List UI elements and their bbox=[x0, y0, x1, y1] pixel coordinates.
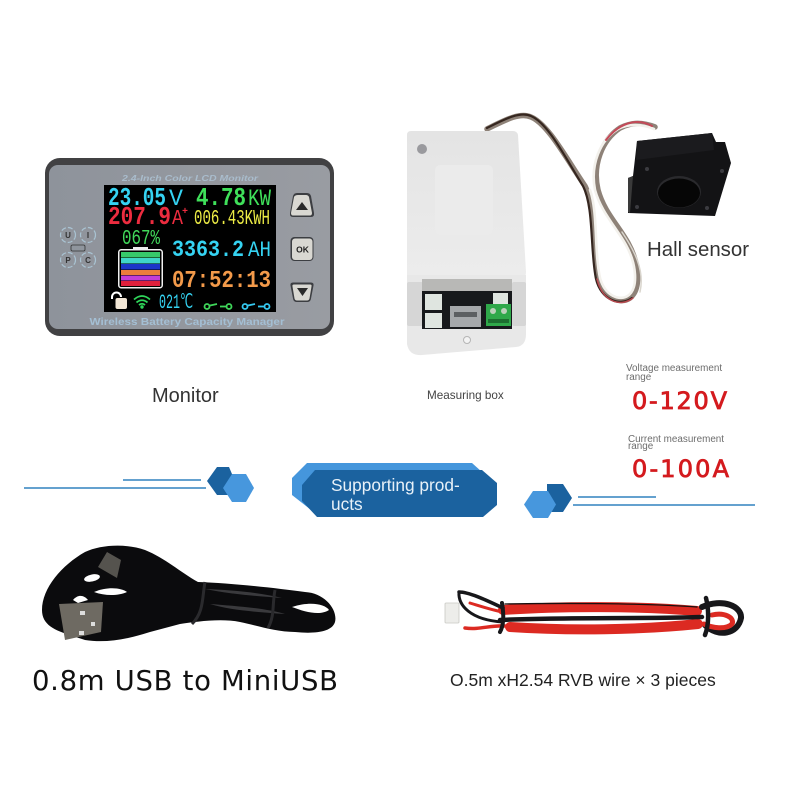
current value: 0-100A bbox=[632, 455, 730, 483]
cable mass bbox=[42, 546, 335, 641]
reading: amp hours: 3363.2 bbox=[172, 237, 244, 263]
box upper shell bbox=[407, 131, 526, 276]
product: USB cable bbox=[42, 546, 335, 641]
button: up bbox=[290, 193, 314, 217]
sensor aperture bbox=[657, 176, 701, 208]
current caption: Current measurement bbox=[628, 434, 724, 445]
current caption: range bbox=[628, 441, 654, 452]
mini USB plug bbox=[98, 552, 121, 578]
monitor bottom caption: Wireless Battery Capacity Manager bbox=[90, 316, 284, 328]
label: Monitor: Monitor bbox=[152, 385, 219, 407]
USB-A plug bbox=[59, 602, 103, 640]
reading: energy: 006.43KWH bbox=[194, 208, 270, 231]
icon: battery level bbox=[119, 247, 162, 288]
label: Hall sensor: Hall sensor bbox=[647, 239, 749, 261]
cable loop gaps bbox=[73, 573, 329, 614]
UIPC indicator cluster bbox=[60, 228, 96, 268]
panel: measuring box bbox=[407, 131, 526, 355]
voltage value: 0-120V bbox=[632, 387, 728, 415]
voltage caption bbox=[626, 363, 722, 383]
panel: monitor device bbox=[45, 158, 334, 336]
reading: current: 207.9 bbox=[108, 202, 171, 232]
reading: clock: 07:52:13 bbox=[172, 268, 271, 295]
reading: current: A bbox=[172, 208, 183, 231]
wire bundle bbox=[459, 592, 741, 635]
UIPC indicator cluster: C bbox=[85, 256, 91, 265]
reading: power: KW bbox=[248, 186, 271, 212]
reading: power: 4.78 bbox=[196, 183, 246, 213]
label: Measuring box: Measuring box bbox=[427, 389, 504, 402]
reading: current: + bbox=[182, 207, 188, 218]
spec: voltage range bbox=[626, 363, 728, 415]
icon: wifi signal bbox=[134, 296, 150, 308]
button: down bbox=[290, 282, 314, 302]
right section decoration bbox=[524, 484, 755, 518]
UIPC indicator cluster: P bbox=[65, 256, 71, 265]
sensor body bbox=[628, 133, 731, 216]
left section decoration bbox=[24, 467, 254, 502]
box led bbox=[417, 144, 427, 154]
banner text: ucts bbox=[331, 494, 363, 514]
icon: unlocked padlock bbox=[112, 292, 127, 309]
reading: amp hours: AH bbox=[248, 238, 271, 263]
product: RVB wire bbox=[445, 592, 741, 635]
banner text: Supporting prod- bbox=[331, 475, 460, 495]
label: USB cable: 0.8m USB to MiniUSB bbox=[32, 665, 338, 697]
reading: voltage: 23.05 bbox=[108, 183, 166, 213]
box mounting hole bbox=[464, 336, 470, 344]
wires: measuring box to hall sensor bbox=[487, 114, 655, 302]
button: OK: OK bbox=[296, 244, 310, 254]
reading: voltage: V bbox=[169, 186, 183, 212]
UIPC indicator cluster: U bbox=[65, 231, 71, 240]
button: OK bbox=[290, 237, 314, 261]
spec: current range bbox=[628, 434, 730, 483]
voltage caption: range bbox=[626, 372, 652, 383]
monitor casing bbox=[45, 158, 334, 336]
label: RVB wire: O.5m xH2.54 RVB wire × 3 pieces bbox=[450, 670, 716, 690]
box label recess bbox=[435, 165, 493, 235]
reading: temperature: 021℃ bbox=[159, 292, 193, 315]
sensor screw holes bbox=[635, 167, 724, 210]
monitor top caption: 2.4-Inch Color LCD Monitor bbox=[121, 173, 259, 183]
wire connector bbox=[445, 603, 459, 623]
panel: hall sensor bbox=[628, 133, 731, 216]
section banner: supporting products bbox=[292, 463, 497, 517]
current caption bbox=[628, 434, 724, 452]
cable strain bands bbox=[192, 582, 205, 624]
reading: battery percent: 067% bbox=[122, 228, 160, 251]
icon: green switch bbox=[204, 304, 232, 309]
box lower shell bbox=[407, 275, 526, 355]
box circuit board bbox=[422, 279, 512, 329]
monitor LCD screen bbox=[104, 183, 276, 315]
icon: blue switch bbox=[242, 304, 270, 309]
voltage caption: Voltage measurement bbox=[626, 363, 722, 374]
UIPC indicator cluster: I bbox=[87, 231, 89, 240]
